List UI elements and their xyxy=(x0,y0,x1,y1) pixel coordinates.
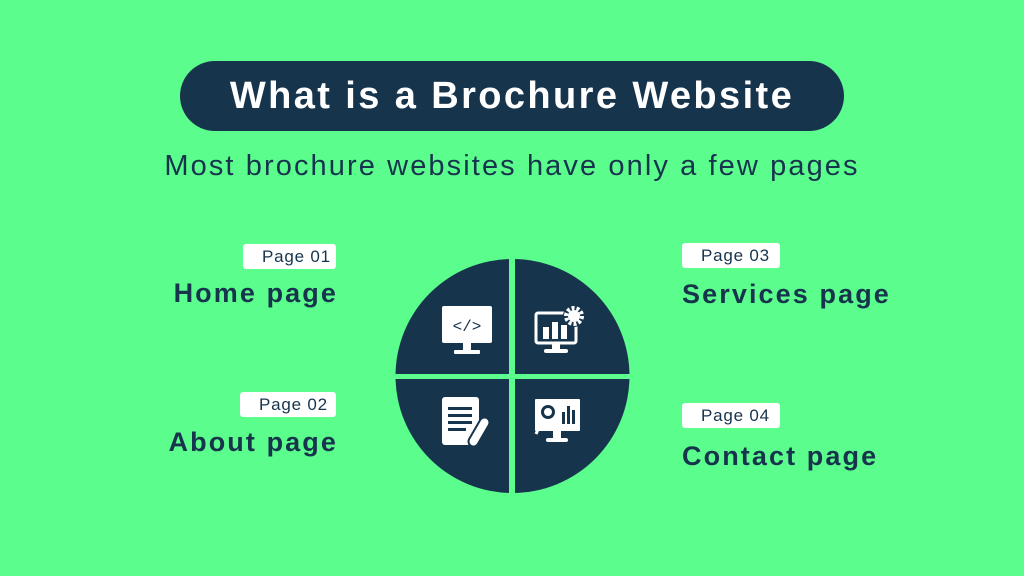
title xyxy=(180,61,844,131)
tag: page 04 xyxy=(682,403,780,428)
pie diagram xyxy=(396,259,630,493)
icon: presentation search xyxy=(535,399,580,442)
label: about page: About page xyxy=(168,427,338,457)
icon: document with pen xyxy=(442,397,491,448)
label: contact page: Contact page xyxy=(682,441,878,471)
label: services page: Services page xyxy=(682,279,891,309)
tag: page 01: Page 01 xyxy=(262,247,331,266)
tag: page 02: Page 02 xyxy=(259,395,328,414)
icon: code monitor: </> xyxy=(453,318,481,336)
subtitle: Most brochure websites have only a few pages xyxy=(164,150,860,182)
icon: analytics gear xyxy=(536,305,585,353)
title: What is a Brochure Website xyxy=(230,75,794,117)
tag: page 01 xyxy=(243,244,336,269)
tag: page 03 xyxy=(682,243,780,268)
tag: page 04: Page 04 xyxy=(701,406,770,425)
label: home page: Home page xyxy=(174,278,338,308)
tag: page 02 xyxy=(240,392,336,417)
tag: page 03: Page 03 xyxy=(701,246,770,265)
icon: code monitor xyxy=(442,306,492,354)
